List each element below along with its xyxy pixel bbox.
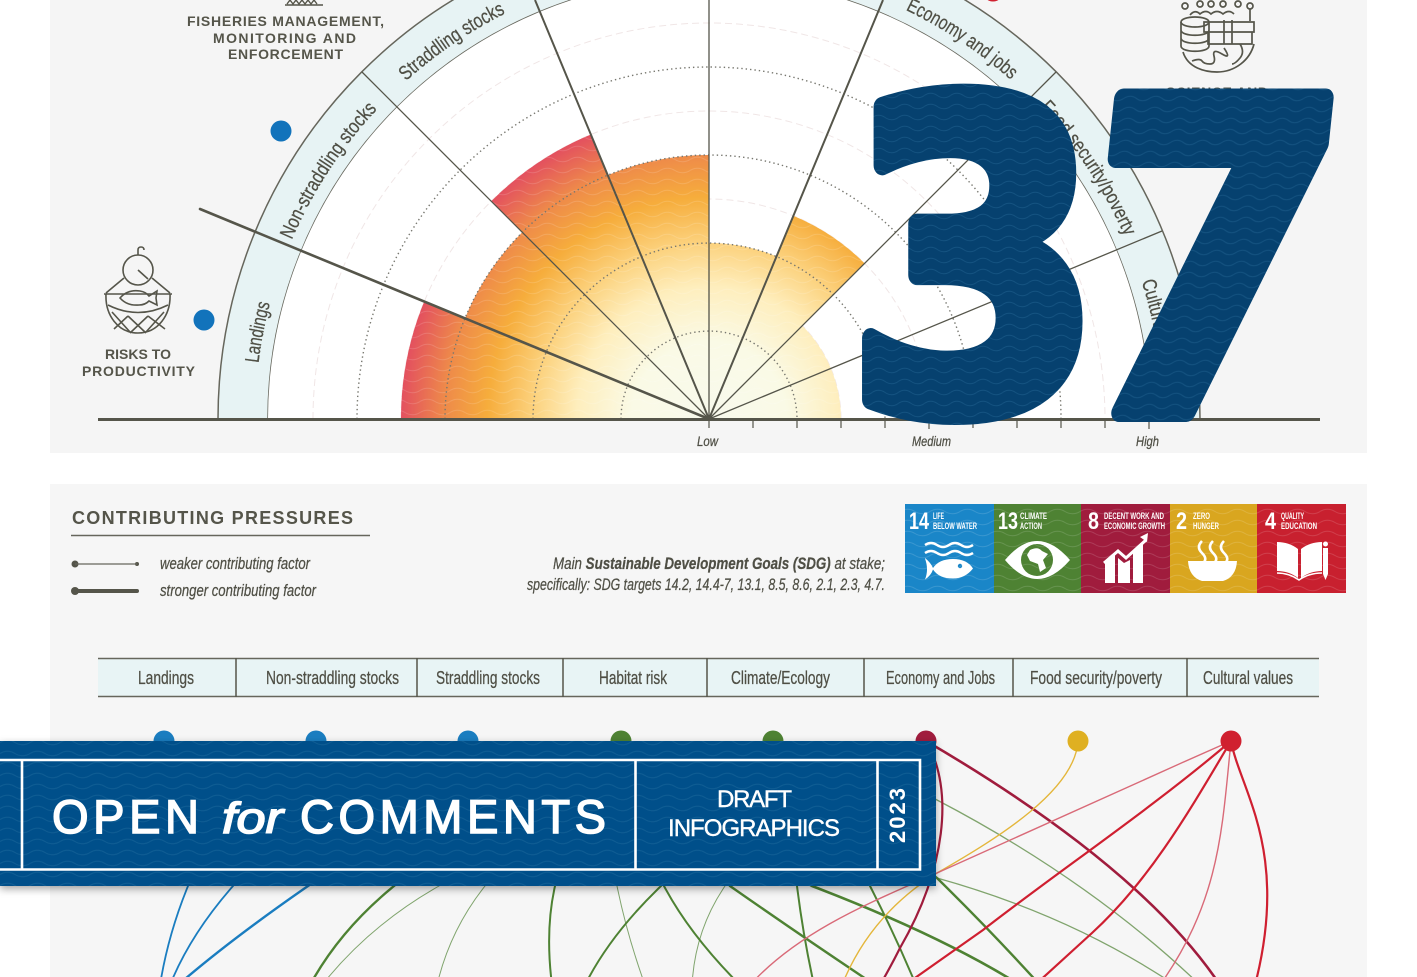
table header: categories: Non-straddling stocks bbox=[266, 668, 399, 688]
SDG 13: CLIMATE bbox=[1020, 511, 1047, 521]
SDG 14: 14 bbox=[909, 508, 929, 535]
SDG 14 bbox=[905, 504, 994, 593]
SDG 8: DECENT WORK AND bbox=[1104, 511, 1164, 521]
label: risks to productivity: RISKS TO bbox=[105, 346, 171, 362]
banner title: for bbox=[222, 794, 286, 843]
table header: categories: Landings bbox=[138, 668, 194, 688]
SDG 2: ZERO bbox=[1193, 511, 1210, 521]
banner subtitle: DRAFT bbox=[717, 786, 792, 813]
chart: heat wedges bbox=[401, 134, 865, 419]
label: fisheries management bbox=[187, 13, 384, 62]
label: fisheries management: MONITORING AND bbox=[213, 30, 356, 46]
SDG 8: 8 bbox=[1088, 508, 1099, 535]
network nodes bbox=[154, 730, 1242, 752]
axis label: low: Low bbox=[697, 433, 719, 449]
big number: 37 bbox=[846, 13, 1363, 514]
banner title bbox=[52, 790, 606, 843]
text: main SDGs: specifically: SDG targets 14.2, 14.4-7, 13.1, 8.5, 8.6, 2.1, 2.3, 4.7. bbox=[527, 575, 885, 594]
SDG 4 bbox=[1257, 504, 1346, 593]
table header: categories bbox=[98, 658, 1319, 697]
SDG 4: QUALITY bbox=[1281, 511, 1304, 521]
axis bbox=[98, 419, 1320, 429]
big number: 37: 3 bbox=[846, 14, 1103, 509]
banner year: 2023 bbox=[885, 788, 910, 843]
table header: categories: Climate/Ecology bbox=[731, 668, 830, 688]
axis label: medium: Medium bbox=[912, 433, 951, 449]
label: fisheries management: ENFORCEMENT bbox=[228, 46, 343, 62]
panel: radial risk chart bbox=[50, 0, 1367, 453]
legend: weaker factor: weaker contributing factor bbox=[160, 554, 311, 573]
ring labels: Cultural values bbox=[1142, 280, 1162, 326]
big number: 37: 7 bbox=[1054, 13, 1363, 514]
table header: categories: Economy and Jobs bbox=[886, 668, 995, 688]
ring labels: Non-straddling stocks bbox=[280, 104, 376, 239]
SDG 2: HUNGER bbox=[1193, 521, 1219, 531]
banner title: COMMENTS bbox=[300, 790, 606, 843]
SDG 8 bbox=[1081, 504, 1170, 593]
legend: weaker factor bbox=[72, 554, 311, 573]
panel: contributing pressures bbox=[50, 484, 1367, 977]
SDG 2 bbox=[1170, 504, 1257, 593]
ring labels: Food security/poverty bbox=[1045, 99, 1134, 234]
SDG 13 bbox=[994, 504, 1081, 593]
table header: categories: Food security/poverty bbox=[1030, 668, 1162, 688]
table header: categories: Habitat risk bbox=[599, 668, 668, 688]
indicator dots bbox=[194, 0, 1004, 330]
axis label: high: High bbox=[1136, 433, 1159, 449]
heading: contributing pressures: CONTRIBUTING PRESSURES bbox=[72, 508, 353, 528]
text: main SDGs bbox=[527, 554, 885, 594]
label: science and knowledge (mostly covered): SCIENCE AND bbox=[1166, 84, 1268, 100]
banner: open for comments bbox=[0, 741, 936, 886]
legend: stronger factor: stronger contributing factor bbox=[160, 581, 317, 600]
text: main SDGs: Main Sustainable Development Goals (SDG) at stake; bbox=[553, 554, 885, 573]
icon: science and knowledge bbox=[1181, 1, 1254, 72]
label: risks to productivity bbox=[82, 346, 196, 379]
SDG 14: BELOW WATER bbox=[933, 521, 977, 531]
banner subtitle bbox=[668, 786, 840, 842]
SDG 4: EDUCATION bbox=[1281, 521, 1317, 531]
banner subtitle: INFOGRAPHICS bbox=[668, 815, 840, 842]
network: connecting curves bbox=[160, 741, 1267, 977]
SDG 8: ECONOMIC GROWTH bbox=[1104, 521, 1165, 531]
legend: stronger factor bbox=[71, 581, 317, 600]
label: fisheries management: FISHERIES MANAGEMENT, bbox=[187, 13, 384, 29]
icon: fisheries management bbox=[285, 0, 323, 5]
SDG tiles bbox=[905, 504, 1346, 593]
SDG 4: 4 bbox=[1265, 508, 1277, 535]
SDG 14: LIFE bbox=[933, 511, 944, 521]
label: risks to productivity: PRODUCTIVITY bbox=[82, 363, 196, 379]
SDG 2: 2 bbox=[1176, 508, 1187, 535]
SDG 13: 13 bbox=[998, 508, 1018, 535]
banner title: OPEN bbox=[52, 790, 199, 843]
band: outer label ring bbox=[218, 0, 1200, 419]
ring labels bbox=[244, 0, 1162, 362]
SDG 13: ACTION bbox=[1020, 521, 1042, 531]
icon: risks to productivity bbox=[104, 247, 172, 333]
table header: categories: Cultural values bbox=[1203, 668, 1293, 688]
ring labels: Landings bbox=[244, 302, 272, 362]
table header: categories: Straddling stocks bbox=[436, 668, 540, 688]
